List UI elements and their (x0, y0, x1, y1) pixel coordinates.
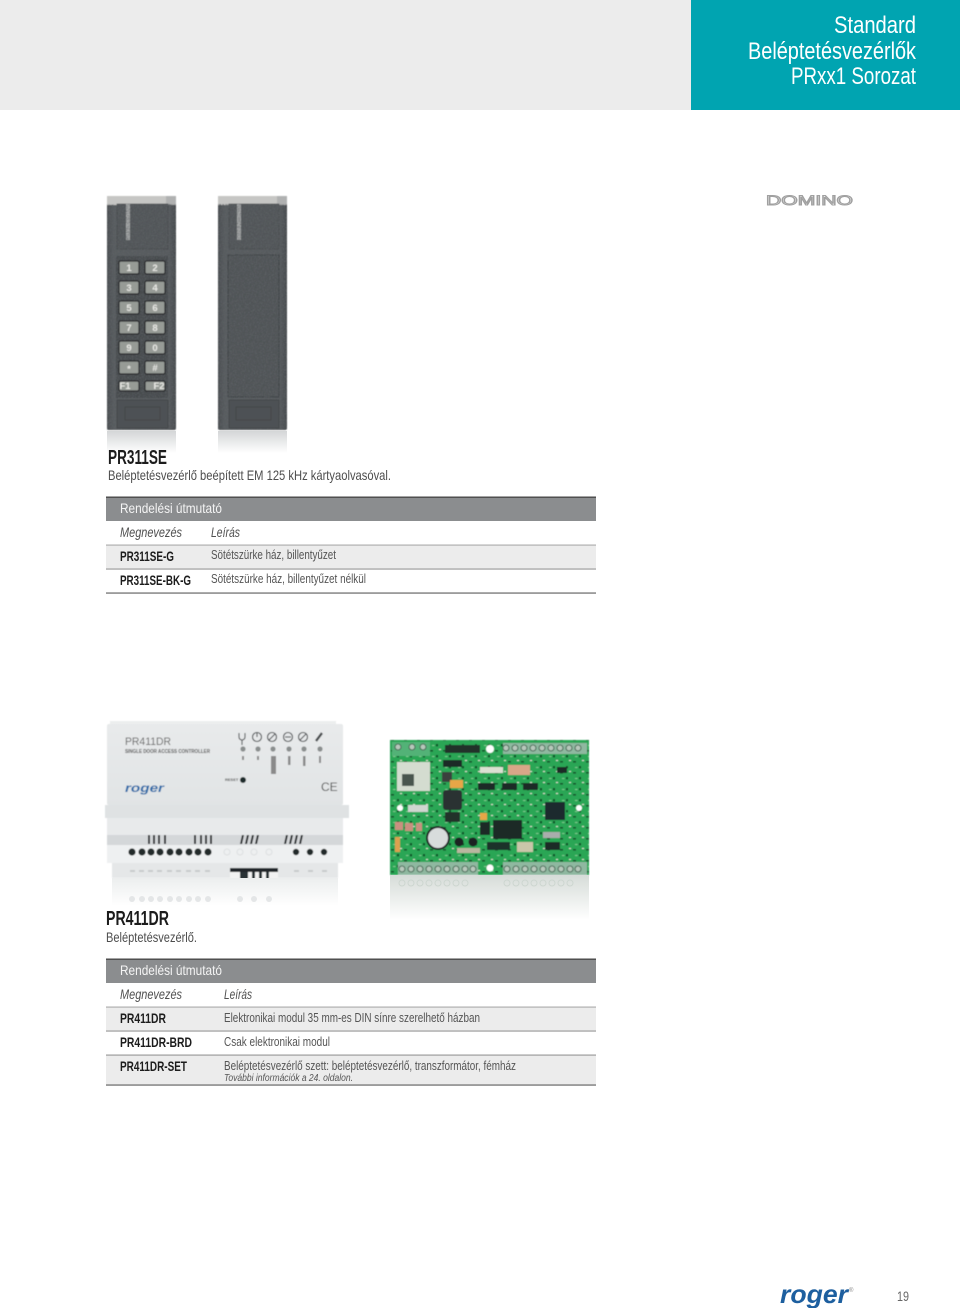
device logo: roger (125, 781, 166, 795)
table: PR311SE ordering guide: PR311SE-BK-G (120, 572, 191, 588)
keypad keys: 9 (126, 343, 132, 354)
product photo: PR411DR electronics board (390, 740, 589, 875)
keypad keys: F1 (119, 381, 131, 392)
table: PR311SE ordering guide: Megnevezés (120, 524, 182, 540)
title block: PRxx1 Sorozat (791, 63, 916, 90)
title block (691, 0, 960, 110)
table: PR411DR ordering guide: PR411DR-BRD (120, 1034, 192, 1050)
product photo: PR311SE-BK-G reader without keypad (218, 196, 287, 430)
top grey band (0, 0, 691, 110)
keypad keys: 0 (152, 343, 158, 354)
reflection of DIN housing (112, 878, 338, 906)
table: PR411DR ordering guide: Megnevezés (120, 986, 182, 1002)
device label: PR411DR (125, 736, 171, 748)
table: PR311SE ordering guide: Leírás (211, 524, 240, 540)
title block: Standard (834, 12, 916, 39)
CE mark: CE (321, 780, 338, 794)
keypad keys: 4 (152, 283, 158, 294)
product photo: PR411DR DIN rail housing: SINGLE DOOR ACCESS CONTROLLER (125, 749, 210, 755)
description: PR311SE: Beléptetésvezérlő beépített EM 125 kHz kártyaolvasóval. (108, 467, 391, 483)
footer logo: roger: ® (849, 1287, 854, 1294)
keypad keys: 2 (152, 263, 158, 274)
heading: PR411DR: PR411DR (106, 908, 169, 930)
radio module (397, 762, 430, 791)
table: PR411DR ordering guide: További információk a 24. oldalon. (224, 1073, 353, 1084)
table: PR411DR ordering guide: Leírás (224, 986, 252, 1002)
domino logo: DOMINO (766, 193, 853, 208)
mounting holes (397, 745, 582, 872)
table: PR311SE ordering guide: PR311SE-G (120, 548, 174, 564)
table: PR311SE ordering guide: Sötétszürke ház, billentyűzet nélkül (211, 571, 366, 586)
title block: Beléptetésvezérlők (748, 38, 917, 65)
product photo: PR311SE-G keypad reader (107, 196, 176, 430)
table: PR411DR ordering guide: Rendelési útmutató (120, 962, 222, 978)
table: PR311SE ordering guide (106, 496, 596, 594)
heading: PR311SE: PR311SE (108, 447, 167, 469)
capacitor (427, 827, 449, 849)
keypad keys (119, 261, 165, 392)
table: PR311SE ordering guide: Rendelési útmutató (120, 500, 222, 516)
terminal screws (128, 848, 327, 856)
chips (478, 783, 495, 790)
reset button: RESET (225, 777, 239, 782)
reflection of keypad reader (107, 431, 176, 453)
table: PR411DR ordering guide: Elektronikai modul 35 mm-es DIN sínre szerelhető házban (224, 1010, 480, 1025)
fuses (395, 822, 403, 830)
keypad keys: * (127, 364, 131, 375)
terminal rows (395, 744, 581, 872)
product photo: PR411DR DIN rail housing (105, 721, 349, 884)
table: PR411DR ordering guide (106, 958, 596, 1086)
description: PR411DR: Beléptetésvezérlő. (106, 929, 197, 945)
table: PR411DR ordering guide: Beléptetésvezérlő szett: beléptetésvezérlő, transzformátor, fémház (224, 1058, 516, 1073)
table: PR411DR ordering guide: Csak elektronikai modul (224, 1034, 330, 1049)
keypad keys: # (152, 363, 158, 374)
connector header (445, 745, 480, 753)
reflection of reader (218, 431, 287, 453)
status icons and LEDs (239, 732, 323, 774)
table: PR311SE ordering guide: Sötétszürke ház, billentyűzet (211, 547, 336, 562)
reflection of board (390, 875, 589, 920)
inductor (443, 790, 462, 810)
keypad keys: 1 (126, 263, 132, 274)
keypad keys: 6 (152, 303, 158, 314)
DIN clip (230, 868, 278, 884)
keypad keys: 3 (126, 283, 132, 294)
table: PR411DR ordering guide: PR411DR-SET (120, 1058, 187, 1074)
table: PR411DR ordering guide: PR411DR (120, 1010, 166, 1026)
ventilation slots (148, 835, 303, 844)
page number: 19 (897, 1289, 909, 1304)
keypad keys: 7 (126, 323, 132, 334)
keypad keys: 5 (126, 303, 132, 314)
keypad keys: F2 (153, 381, 165, 392)
keypad keys: 8 (152, 323, 158, 334)
